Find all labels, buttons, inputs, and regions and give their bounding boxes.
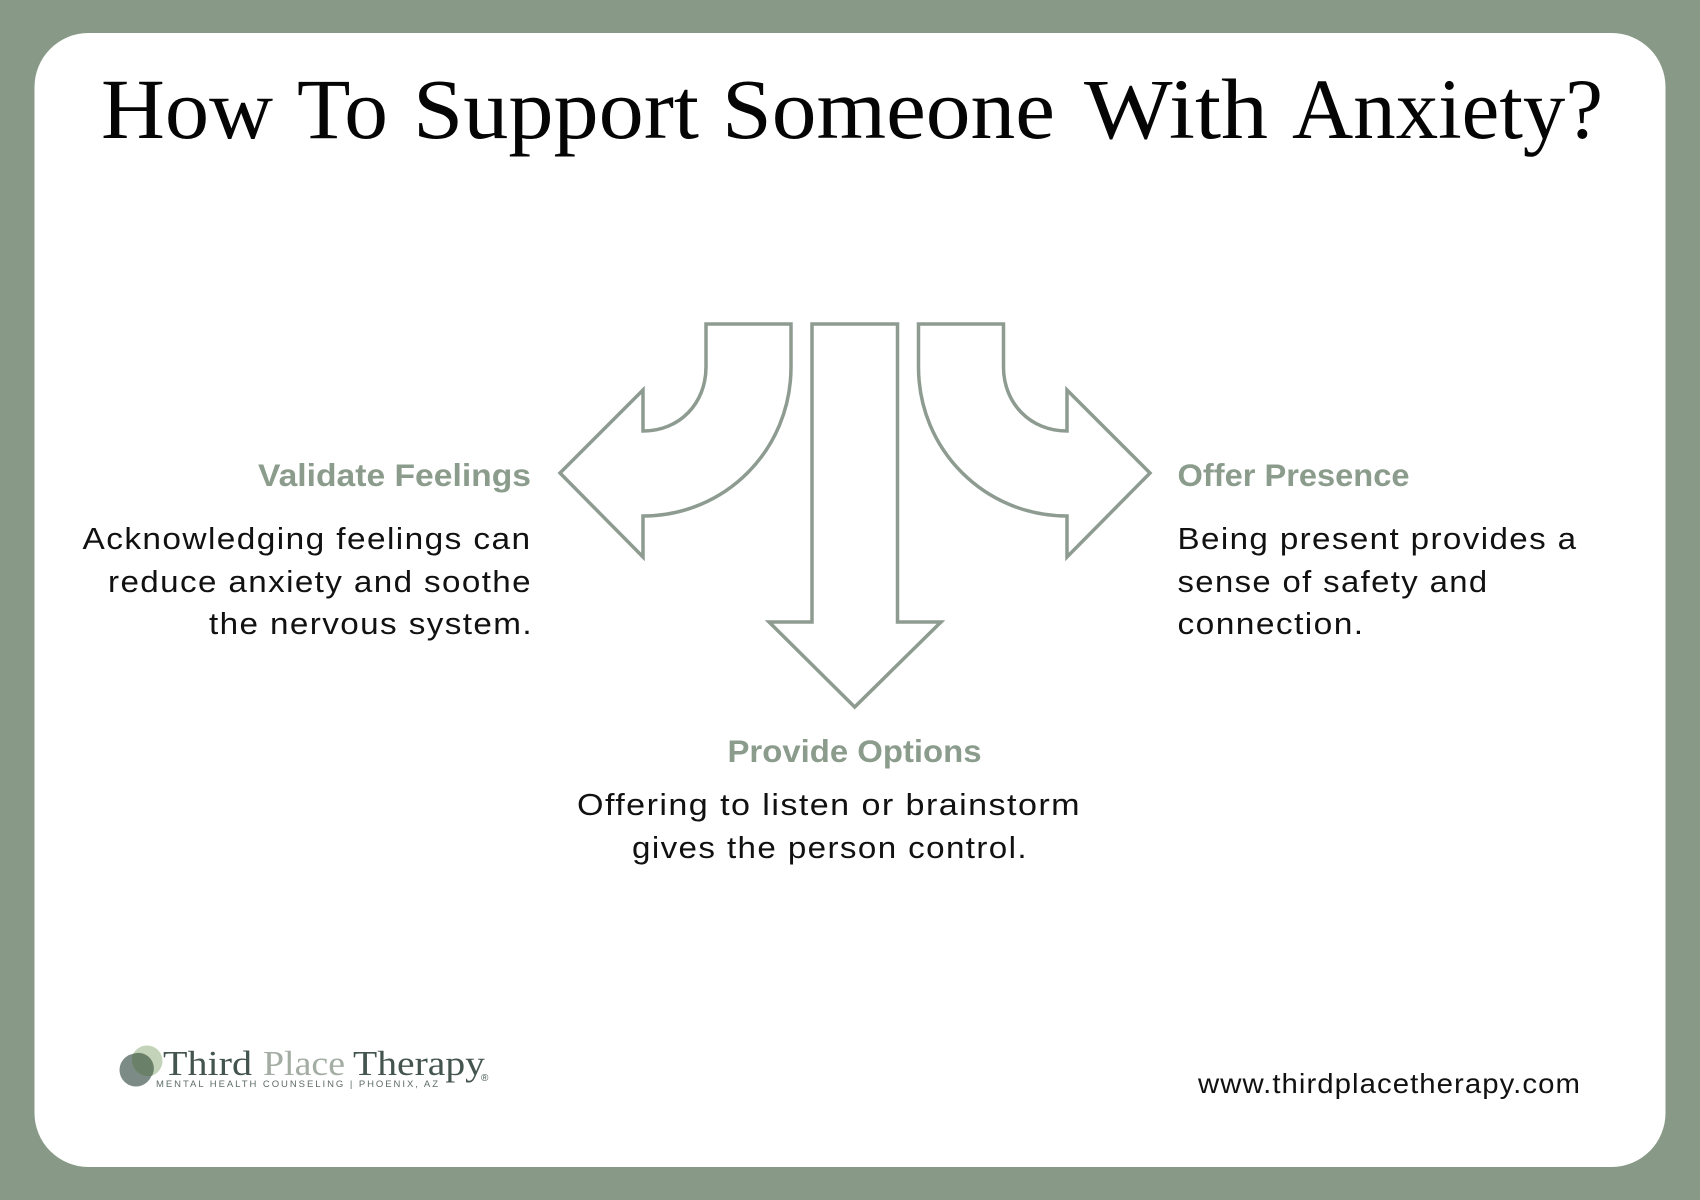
logo [120, 1044, 489, 1090]
heading: offer presence: Offer Presence [1178, 457, 1410, 493]
body: offer presence: sense of safety and [1178, 564, 1488, 599]
arrows diagram [560, 324, 1150, 707]
body: validate feelings: reduce anxiety and soothe [108, 564, 532, 599]
title: Someone [722, 61, 1055, 157]
body: offer presence: connection. [1178, 606, 1364, 641]
logo wordmark: Place [263, 1044, 345, 1083]
text block: offer presence [1178, 457, 1578, 641]
body: offer presence: Being present provides a [1178, 521, 1578, 556]
title [101, 61, 1603, 157]
text block: provide options [577, 733, 1081, 865]
title: Support [413, 61, 699, 157]
icon: overlapping circles [120, 1046, 162, 1086]
body: offer presence [1178, 521, 1578, 641]
heading: provide options: Provide Options [728, 733, 982, 769]
logo wordmark [163, 1044, 486, 1083]
registered mark: ® [481, 1073, 489, 1084]
body: validate feelings [82, 521, 533, 641]
logo wordmark: Third [163, 1044, 253, 1083]
title: How [101, 61, 273, 157]
body: validate feelings: Acknowledging feelings can [82, 521, 532, 556]
text block: validate feelings [82, 457, 533, 641]
website url: www.thirdplacetherapy.com [1197, 1068, 1581, 1099]
body: provide options: gives the person control. [632, 830, 1028, 865]
arrow: right [918, 324, 1150, 557]
arrow: left [560, 324, 791, 557]
heading: validate feelings: Validate Feelings [258, 457, 531, 493]
title: To [297, 61, 388, 157]
title: With [1084, 61, 1268, 157]
logo wordmark: Therapy [353, 1044, 486, 1083]
body: provide options [577, 787, 1081, 865]
arrow: down [769, 324, 941, 707]
body: provide options: Offering to listen or brainstorm [577, 787, 1081, 822]
title: Anxiety? [1292, 61, 1603, 157]
body: validate feelings: the nervous system. [209, 606, 533, 641]
logo tagline: MENTAL HEALTH COUNSELING | PHOENIX, AZ [156, 1079, 438, 1090]
